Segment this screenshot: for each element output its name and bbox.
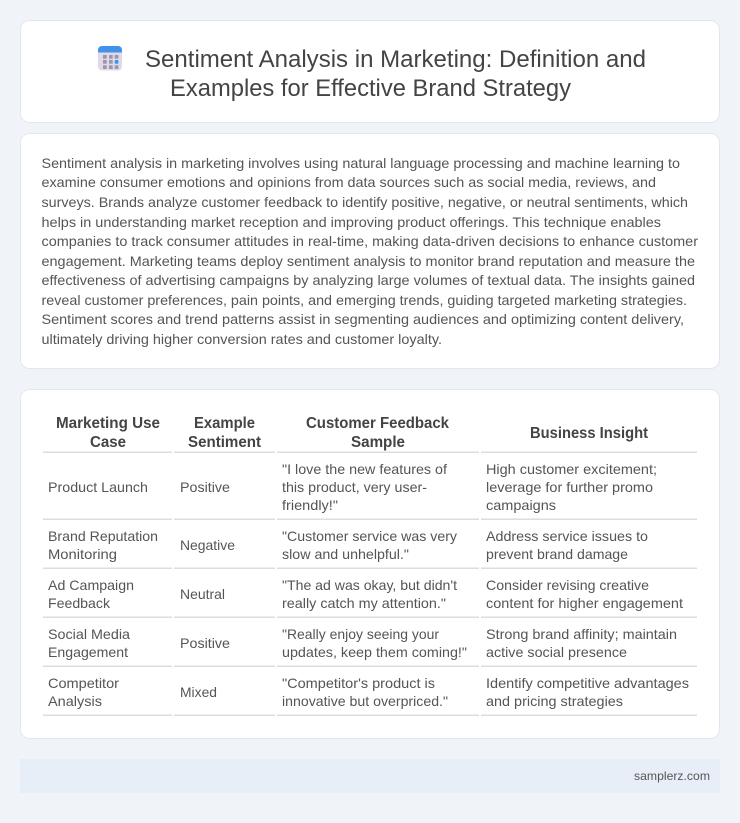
table header row: Business Insight <box>530 425 649 442</box>
table row: social media engagement: Social Media <box>48 626 130 642</box>
text block: description: reveal customer preferences, pain points, and emerging trends, guiding targeted marketing strategies. <box>42 292 687 308</box>
table row: product launch: leverage for further promo <box>486 479 653 495</box>
table row: competitor analysis: Mixed <box>180 684 217 700</box>
table row: ad campaign feedback: Neutral <box>180 586 225 602</box>
title: Examples for Effective Brand Strategy <box>170 75 571 102</box>
text block: description: Sentiment analysis in marketing involves using natural language processing and machine learning to <box>42 155 680 171</box>
table row: social media engagement: Engagement <box>48 644 128 660</box>
text block: description <box>42 155 698 347</box>
table row: ad campaign feedback: Consider revising creative <box>486 577 649 593</box>
table row: competitor analysis <box>43 675 697 716</box>
footer bar <box>20 759 720 793</box>
text block: description: engagement. Marketing teams deploy sentiment analysis to monitor brand reputation and measure the <box>42 253 695 269</box>
text block: description: effectiveness of advertising campaigns by analyzing large volumes of textual data. The insights gained <box>42 272 695 288</box>
table row: brand reputation monitoring: Monitoring <box>48 546 117 562</box>
table row: social media engagement: Positive <box>180 635 230 651</box>
footer bar: samplerz.com <box>634 769 710 783</box>
table row: competitor analysis: and pricing strategies <box>486 693 623 709</box>
table row: brand reputation monitoring: Brand Reputation <box>48 528 158 544</box>
panel: table <box>20 390 720 738</box>
table header row <box>43 415 697 453</box>
table header row: Customer Feedback <box>306 415 449 432</box>
title <box>145 46 646 102</box>
text block: description: Sentiment scores and trend patterns assist in segmenting audiences and optimizing content delivery, <box>42 311 684 327</box>
table row: product launch: "I love the new features of <box>282 461 447 477</box>
table header row: Example <box>194 415 255 432</box>
table row: product launch: High customer excitement; <box>486 461 657 477</box>
table row: brand reputation monitoring: slow and unhelpful." <box>282 546 409 562</box>
icon: calendar <box>98 46 122 70</box>
panel: description paragraph <box>20 134 720 368</box>
table row: social media engagement <box>43 626 697 667</box>
table header row: Case <box>90 434 126 451</box>
table row: social media engagement: updates, keep them coming!" <box>282 644 467 660</box>
table row: product launch: this product, very user- <box>282 479 427 495</box>
table row: ad campaign feedback: Ad Campaign <box>48 577 134 593</box>
table row: social media engagement: Strong brand affinity; maintain <box>486 626 677 642</box>
table row: product launch: friendly!" <box>282 497 338 513</box>
text block: description: ultimately driving higher conversion rates and customer loyalty. <box>42 331 442 347</box>
table row: brand reputation monitoring: prevent brand damage <box>486 546 628 562</box>
table row: brand reputation monitoring: "Customer service was very <box>282 528 457 544</box>
table row: ad campaign feedback: "The ad was okay, but didn't <box>282 577 457 593</box>
panel: header <box>20 20 720 122</box>
table row: brand reputation monitoring: Negative <box>180 537 235 553</box>
text block: description: surveys. Brands analyze customer feedback to identify positive, negative, or neutral sentiments, which <box>42 194 688 210</box>
table row: ad campaign feedback <box>43 577 697 618</box>
text block: description: examine consumer emotions and opinions from data sources such as social media, reviews, and <box>42 174 656 190</box>
table row: ad campaign feedback: content for higher engagement <box>486 595 683 611</box>
table header row: Sentiment <box>188 434 262 451</box>
table row: product launch <box>43 461 697 520</box>
table row: social media engagement: "Really enjoy seeing your <box>282 626 439 642</box>
table row: competitor analysis: Competitor <box>48 675 119 691</box>
table row: product launch: campaigns <box>486 497 556 513</box>
text block: description: helps in understanding market reception and improving product offerings. This technique enables <box>42 214 661 230</box>
table row: ad campaign feedback: really catch my attention." <box>282 595 446 611</box>
table row: competitor analysis: Analysis <box>48 693 102 709</box>
table row: social media engagement: active social presence <box>486 644 627 660</box>
text block: description: companies to track consumer attitudes in real-time, making data-driven decisions to enhance customer <box>42 233 698 249</box>
table row: competitor analysis: "Competitor's product is <box>282 675 435 691</box>
table row: ad campaign feedback: Feedback <box>48 595 111 611</box>
table row: product launch: Product Launch <box>48 479 148 495</box>
table row: product launch: Positive <box>180 479 230 495</box>
table header row: Marketing Use <box>56 415 160 432</box>
table row: brand reputation monitoring <box>43 528 697 569</box>
table row: competitor analysis: innovative but overpriced." <box>282 693 448 709</box>
title: Sentiment Analysis in Marketing: Definition and <box>145 46 646 73</box>
table row: brand reputation monitoring: Address service issues to <box>486 528 648 544</box>
table header row: Sample <box>351 434 405 451</box>
table row: competitor analysis: Identify competitive advantages <box>486 675 689 691</box>
